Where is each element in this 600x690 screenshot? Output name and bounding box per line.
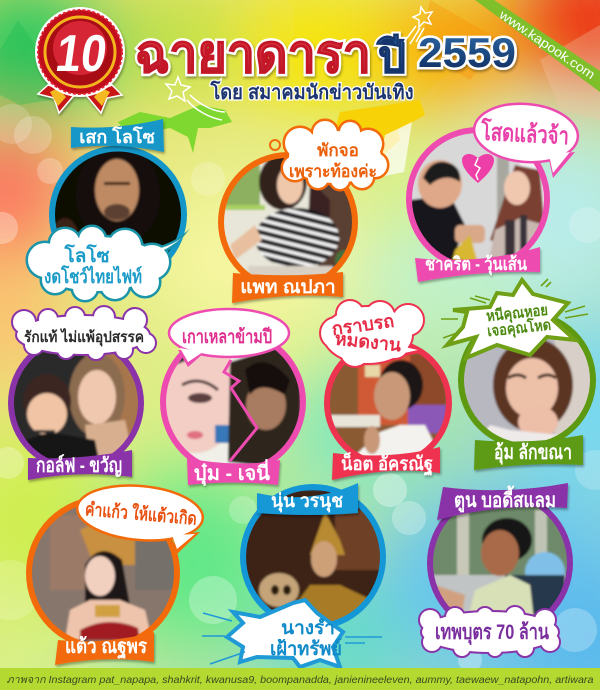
nickname bubble: งดโชว์ไทยไฟท์: [44, 265, 142, 288]
portrait photo: [224, 158, 352, 276]
name ribbon: อุ้ม ลักขณา: [494, 441, 572, 465]
portrait photo: [464, 339, 590, 442]
title: ฉายาดารา: [135, 25, 371, 84]
panel: เสก โลโซ: [28, 119, 190, 300]
nickname bubble: คำแก้ว ให้แต้วเกิด: [84, 498, 198, 529]
title: 2559: [418, 29, 516, 76]
subtitle: โดย สมาคมนักข่าวบันเทิง: [210, 80, 414, 104]
portrait ring: [427, 490, 573, 636]
corner ribbon: website: www.kapook.com: [496, 6, 598, 82]
star doodle upper: [404, 7, 432, 44]
nickname burst: หนีคุณหอย: [485, 302, 549, 326]
nickname bubble: เพราะท้องค่ะ: [289, 162, 377, 181]
name ribbon: [332, 447, 440, 480]
portrait photo: [166, 350, 300, 464]
name ribbon: บุ๋ม - เจนี่: [194, 458, 270, 486]
nickname bubble: [28, 227, 190, 300]
nickname bubble: [472, 100, 580, 178]
name ribbon: กอล์ฟ - ขวัญ: [36, 454, 122, 477]
nickname bubble: เทพบุตร 70 ล้าน: [435, 620, 549, 646]
nickname bubble: พักจอ: [317, 141, 359, 160]
title: [135, 25, 516, 84]
name ribbon: [28, 450, 132, 480]
name ribbon: นุ่น วรนุช: [271, 491, 343, 513]
footer credits: ภาพจาก Instagram pat_napapa, shahkrit, kwanusa9, boompanadda, janienineeleven, aummy, taewaew_natapohn, artiwara: [6, 674, 594, 686]
nickname bubble: รักแท้ ไม่แพ้อุปสรรค: [24, 327, 144, 347]
name ribbon: เสก โลโซ: [79, 126, 155, 147]
title: ปี: [376, 33, 406, 82]
portrait photo: [32, 507, 174, 642]
icon: broken heart: [462, 154, 494, 183]
panel: นุ่น วรนุช: [202, 483, 386, 667]
nickname bubble: หมดงาน: [334, 329, 403, 355]
name ribbon: [71, 119, 164, 152]
portrait photo: [246, 490, 380, 622]
portrait photo: [14, 352, 138, 458]
name ribbon: [257, 483, 358, 515]
portrait ring: [406, 127, 550, 271]
star doodle lower: [166, 77, 225, 120]
portrait ring: [8, 335, 144, 471]
name ribbon: [437, 483, 568, 520]
crack on portrait: [224, 360, 257, 461]
portrait ring: [240, 484, 386, 630]
portrait photo: [433, 506, 567, 615]
panel: แพท ณปภา: [218, 121, 387, 303]
portrait ring: [26, 496, 180, 650]
medal badge: 10: 10: [52, 25, 110, 83]
nickname bubble: โลโซ: [64, 244, 110, 267]
portrait ring: [160, 329, 306, 475]
panel: แต้ว ณฐพร: [26, 481, 205, 665]
name ribbon: [187, 458, 280, 486]
panel: ชาคริต-วุ้นเส้น: [405, 100, 580, 282]
name ribbon: [55, 632, 154, 665]
title: ฉายาดารา: [135, 25, 371, 84]
nickname bubble: [270, 121, 387, 189]
corner ribbon: website: [475, 0, 600, 92]
panel: กอล์ฟ-ขวัญ: [8, 307, 155, 480]
nickname burst: เฝ้าทรัพย์: [270, 638, 342, 660]
nickname bubble: โสดแล้วจ้า: [480, 117, 570, 150]
portrait ring: [458, 311, 596, 449]
name ribbon: [474, 435, 583, 470]
name ribbon: น็อต อัครณัฐ: [341, 451, 433, 477]
nickname burst: [441, 279, 588, 358]
nickname bubble: [321, 301, 425, 366]
name ribbon: แต้ว ณฐพร: [65, 635, 147, 660]
portrait ring: [49, 146, 187, 284]
panel: ตูน บอดี้สแลม: [420, 483, 573, 656]
nickname bubble: กราบรถ: [331, 311, 395, 339]
panel: น็อต อัครณัฐ: [321, 301, 455, 480]
panel: อุ้ม ลักขณา: [441, 279, 596, 470]
name ribbon: ตูน บอดี้สแลม: [454, 485, 556, 514]
footer credits: [0, 668, 600, 690]
nickname bubble: [420, 607, 559, 656]
portrait ring: [324, 339, 452, 467]
nickname burst: [202, 600, 382, 667]
nickname bubble: [13, 307, 155, 359]
nickname bubble: [169, 309, 289, 367]
portrait photo: [55, 152, 181, 252]
name ribbon: [232, 272, 343, 303]
medal ribbons: [38, 85, 122, 113]
name ribbon: [415, 247, 540, 282]
medal badge: 10: [35, 7, 125, 113]
panel: บุ๋ม-เจนี่: [143, 309, 306, 486]
portrait photo: [412, 133, 544, 260]
nickname bubble: [75, 481, 205, 554]
name ribbon: ชาคริต - วุ้นเส้น: [425, 254, 528, 276]
portrait photo: [330, 354, 446, 456]
name ribbon: แพท ณปภา: [240, 277, 336, 298]
nickname burst: นางรำ: [281, 618, 335, 639]
title: ปี: [376, 33, 406, 82]
portrait ring: [218, 152, 358, 292]
nickname burst: เจอคุณโหด: [486, 315, 552, 341]
nickname bubble: เกาเหลาข้ามปี: [182, 326, 272, 348]
